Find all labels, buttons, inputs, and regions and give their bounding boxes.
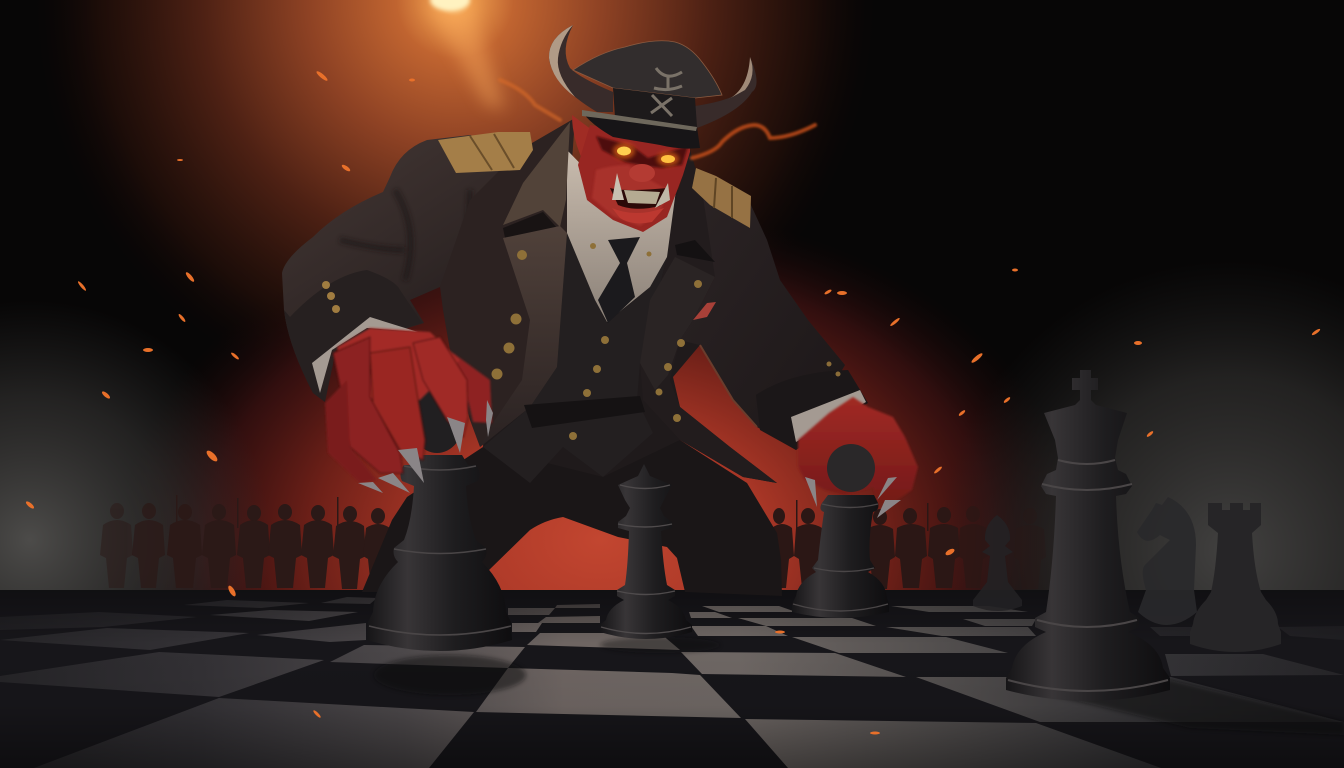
left epaulet — [438, 132, 533, 173]
light squares — [0, 597, 1344, 768]
officer cap — [573, 41, 722, 149]
ear — [572, 115, 595, 165]
tie — [598, 237, 640, 323]
right cuff — [756, 370, 868, 450]
little finger — [453, 353, 492, 423]
right sleeve rim light — [700, 345, 757, 427]
army silhouettes: right — [770, 500, 1046, 589]
tusks — [612, 173, 624, 200]
coat front: left panel — [440, 118, 575, 447]
index finger — [333, 337, 403, 473]
king — [1006, 370, 1170, 701]
ring finger — [413, 337, 468, 437]
right hand — [798, 397, 918, 503]
glowing eyes — [613, 143, 635, 159]
pocket square — [693, 302, 716, 320]
torso base — [483, 190, 777, 483]
left piece reflection — [374, 655, 526, 695]
left upper lapel — [503, 122, 570, 227]
right hand claws — [805, 477, 901, 518]
left chess piece: pawn under hand — [367, 387, 512, 651]
back bishop — [973, 515, 1022, 611]
king shadow — [1040, 680, 1344, 735]
left cuff buttons — [322, 281, 340, 313]
right lapel — [640, 257, 715, 390]
demon head — [572, 115, 690, 232]
chess board — [0, 590, 1344, 768]
board shading — [0, 590, 1344, 768]
face — [578, 125, 690, 232]
waist belt — [524, 396, 645, 428]
coat front: right panel — [640, 150, 777, 483]
back of hand — [337, 328, 460, 400]
middle finger — [370, 347, 425, 460]
waistcoat — [483, 233, 667, 483]
trousers and legs — [362, 440, 782, 596]
back knight — [1137, 497, 1197, 625]
sleeve folds — [340, 190, 470, 280]
nose — [629, 164, 655, 182]
middle piece shadow — [600, 637, 720, 653]
light beam at top — [425, 0, 505, 110]
right chess piece: pawn under hand — [792, 444, 889, 618]
shirt — [567, 150, 676, 322]
right epaulet — [692, 168, 751, 228]
centre chess piece: queen — [600, 464, 692, 639]
rook — [1190, 503, 1281, 652]
left cuff — [284, 270, 422, 402]
left lower lapel — [480, 226, 567, 447]
right horn — [695, 57, 757, 128]
left horn — [549, 25, 613, 112]
thumb — [325, 380, 377, 483]
coat buttons — [492, 243, 702, 440]
right arm — [667, 188, 845, 450]
cap badge — [651, 68, 682, 116]
army silhouettes: left — [100, 495, 392, 589]
left hand claws — [358, 400, 493, 493]
mouth — [610, 188, 668, 209]
smoke from nostril — [500, 80, 815, 158]
left arm — [282, 135, 530, 402]
left hand — [325, 328, 492, 483]
